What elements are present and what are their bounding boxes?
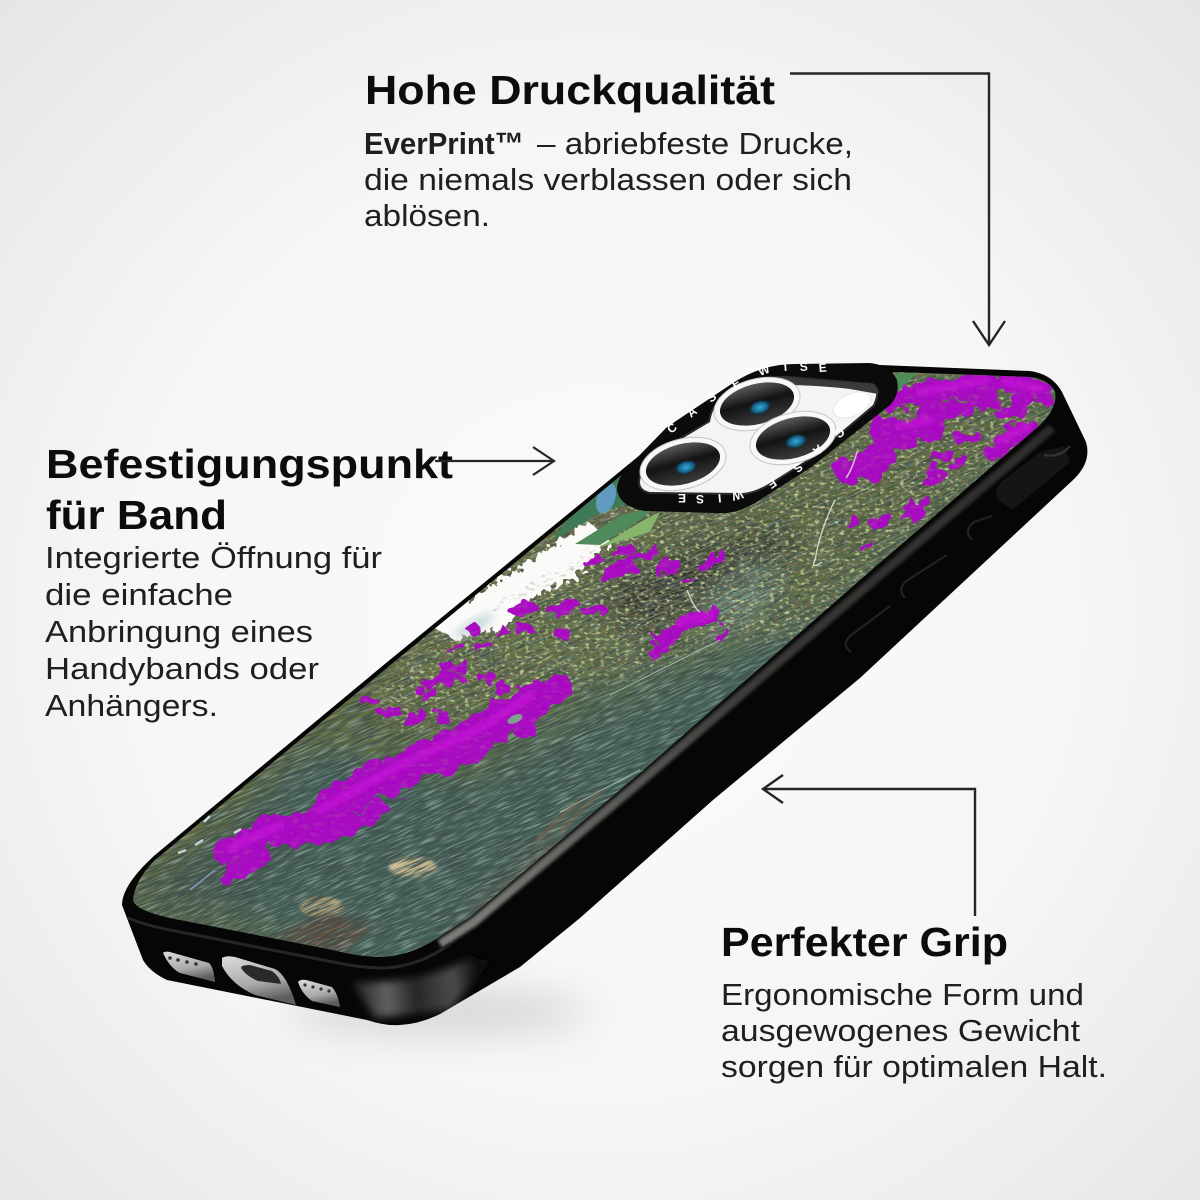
side buttons [846,446,1070,652]
arrow: to strap point [435,447,554,475]
hole in strand [508,714,522,724]
needle texture [133,372,1056,957]
callout: print quality [364,67,853,233]
foliage colour zones [133,385,1060,950]
lens top [708,368,806,440]
mid clusters [428,664,462,683]
heading: Befestigungspunkt [46,441,453,487]
body text [45,540,382,723]
phone case illustration [122,363,1088,1046]
body text: die einfache [45,577,233,612]
white stems and light specks [178,452,857,890]
body text: ablösen. [364,198,490,233]
bottom corner reflection [352,958,492,1018]
drop shadow under phone [290,992,590,1032]
body text: EverPrint™ [364,126,524,161]
magenta flowers [226,382,1044,877]
body text [721,977,1107,1084]
ground patches [268,857,437,952]
ring brand text [664,359,848,506]
ring brand text: CASEWISE [664,359,827,436]
leafy texture upper zone [370,372,1055,735]
ring brand text: CASEWISE [678,425,848,506]
case body [122,365,1087,1025]
brown needles near edge [535,790,600,842]
heading: Hohe Druckqualität [365,67,775,113]
green leaves [553,372,918,548]
body text: Integrierte Öffnung für [45,540,382,575]
lower right cluster [680,615,714,626]
callout: grip [721,919,1107,1084]
heading: Perfekter Grip [721,919,1008,965]
bottom lip highlight [128,918,450,968]
body text: sorgen für optimalen Halt. [721,1049,1107,1084]
island ring [617,363,898,513]
heading: für Band [46,492,227,538]
body text: Handybands oder [45,651,319,686]
usb port [222,956,296,1005]
left speaker [163,952,215,982]
island inner shadow [780,377,878,394]
pink specks on sky [493,544,598,612]
heading [46,441,453,538]
body text: die niemals verblassen oder sich [364,162,852,197]
arrow: to top of case [790,74,1005,345]
blue sky specks [452,610,496,642]
photo print on the case [133,372,1056,957]
camera island [617,359,898,513]
body text: Anbringung eines [45,614,313,649]
lens right [744,402,842,474]
arrow: to side of case [763,775,975,916]
top right mass [892,382,985,402]
callout: strap attachment [45,441,453,723]
body text [364,126,853,233]
body text: Anhängers. [45,688,218,723]
charging port and speakers [163,952,340,1007]
body text: Ergonomische Form und [721,977,1084,1012]
flash highlight [829,387,875,423]
right speaker [298,980,340,1007]
body text: ausgewogenes Gewicht [721,1013,1080,1048]
main flower strand [226,828,297,852]
white sky patch [430,522,612,640]
flower highlights [230,380,1040,848]
island glass [640,378,876,493]
body text: – abriebfeste Drucke, [537,126,853,161]
lens left [634,428,732,500]
case rim shading [440,428,1052,944]
